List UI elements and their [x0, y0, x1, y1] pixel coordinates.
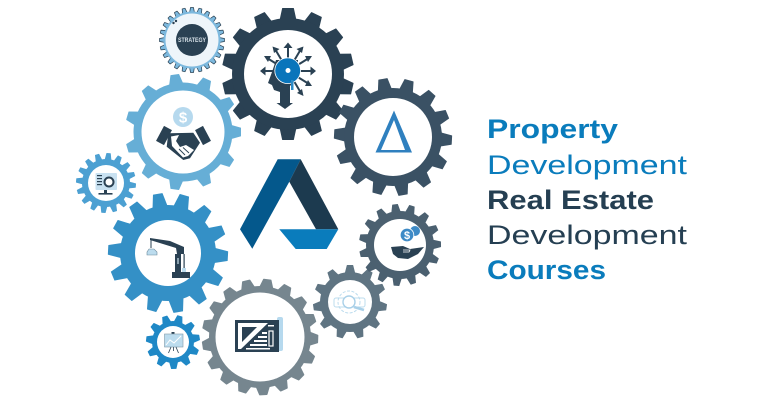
central logo [240, 159, 338, 249]
gear: strategy [160, 8, 224, 72]
icon: monitor [96, 173, 117, 195]
title line: Development dark: Development [487, 220, 688, 250]
icon: dollar coin: $ [179, 110, 188, 126]
icon: hand with coins: $ [404, 230, 410, 242]
title text [487, 114, 688, 285]
title line: Property: Property [487, 114, 618, 144]
icon: handshake [156, 126, 211, 160]
gear: monitor [74, 151, 138, 215]
title line: Development blue: Development [487, 150, 688, 180]
icon: magnifier over gear [334, 291, 365, 313]
gear: crane [105, 190, 231, 316]
title line: Real Estate: Real Estate [487, 185, 654, 215]
icon: blueprint [235, 317, 283, 352]
title line: Courses: Courses [487, 255, 606, 285]
icon: head with rays [260, 42, 316, 109]
icon: crane [147, 238, 190, 278]
gear: presentation board [139, 308, 207, 376]
gear: magnifier [313, 265, 387, 339]
gear: idea head [222, 8, 354, 140]
gear: hand with coins [359, 203, 441, 287]
icon: presentation board [164, 332, 183, 353]
label: strategy: STRATEGY [178, 38, 206, 44]
icon: delta symbol [376, 110, 412, 152]
gear: delta [331, 75, 455, 199]
gear: blueprint [200, 277, 319, 397]
gear: handshake [126, 74, 241, 190]
